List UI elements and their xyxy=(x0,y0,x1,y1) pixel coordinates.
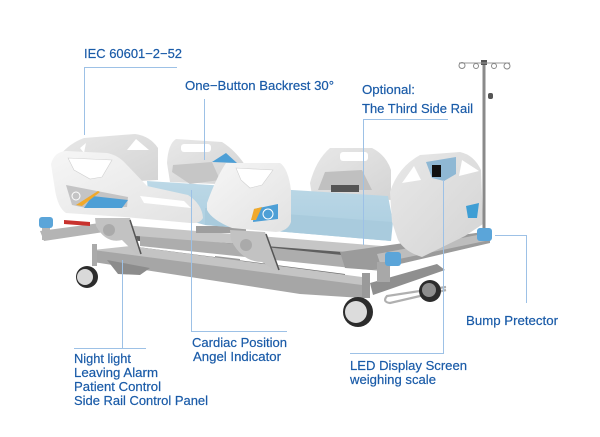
callout: side rail control panel: Leaving Alarm xyxy=(74,365,158,380)
back right rail xyxy=(310,148,391,200)
callout: IEC standard: IEC 60601−2−52 xyxy=(84,46,182,61)
callout: LED display: LED Display Screen xyxy=(350,358,467,373)
callout: cardiac position xyxy=(192,190,287,364)
caster wheel left xyxy=(76,266,98,288)
callout: third side rail xyxy=(362,82,473,245)
callout: side rail control panel: Patient Control xyxy=(74,379,161,394)
hinge brackets xyxy=(95,218,280,270)
callout: bump protector xyxy=(466,236,559,328)
caster wheel front xyxy=(343,297,373,327)
mattress xyxy=(147,181,393,241)
blue bumpers xyxy=(39,217,492,266)
back head rail xyxy=(60,134,158,182)
bed illustration xyxy=(39,60,510,327)
front left side rail xyxy=(51,151,203,223)
lower base frame xyxy=(40,220,490,298)
callout: side rail control panel xyxy=(74,260,208,408)
caster wheel rear xyxy=(419,280,441,302)
foot board with control panel xyxy=(390,152,483,257)
callout: cardiac position: Cardiac Position xyxy=(192,335,287,350)
callout: cardiac position: Angel Indicator xyxy=(193,349,282,364)
callout: LED display xyxy=(349,180,467,387)
back middle rail xyxy=(167,139,245,185)
front middle side rail xyxy=(207,163,291,232)
callout: third side rail: The Third Side Rail xyxy=(362,101,473,116)
callout: side rail control panel: Night light xyxy=(74,351,131,366)
callout: third side rail: Optional: xyxy=(362,82,415,97)
callout: side rail control panel: Side Rail Control Panel xyxy=(74,393,208,408)
foot pedal bar xyxy=(385,287,446,303)
callout: IEC standard xyxy=(84,46,182,135)
callout: bump protector: Bump Pretector xyxy=(466,313,559,328)
callout: one-button backrest: One−Button Backrest 30° xyxy=(185,78,334,93)
IV pole xyxy=(459,60,510,230)
callout: LED display: weighing scale xyxy=(349,372,436,387)
